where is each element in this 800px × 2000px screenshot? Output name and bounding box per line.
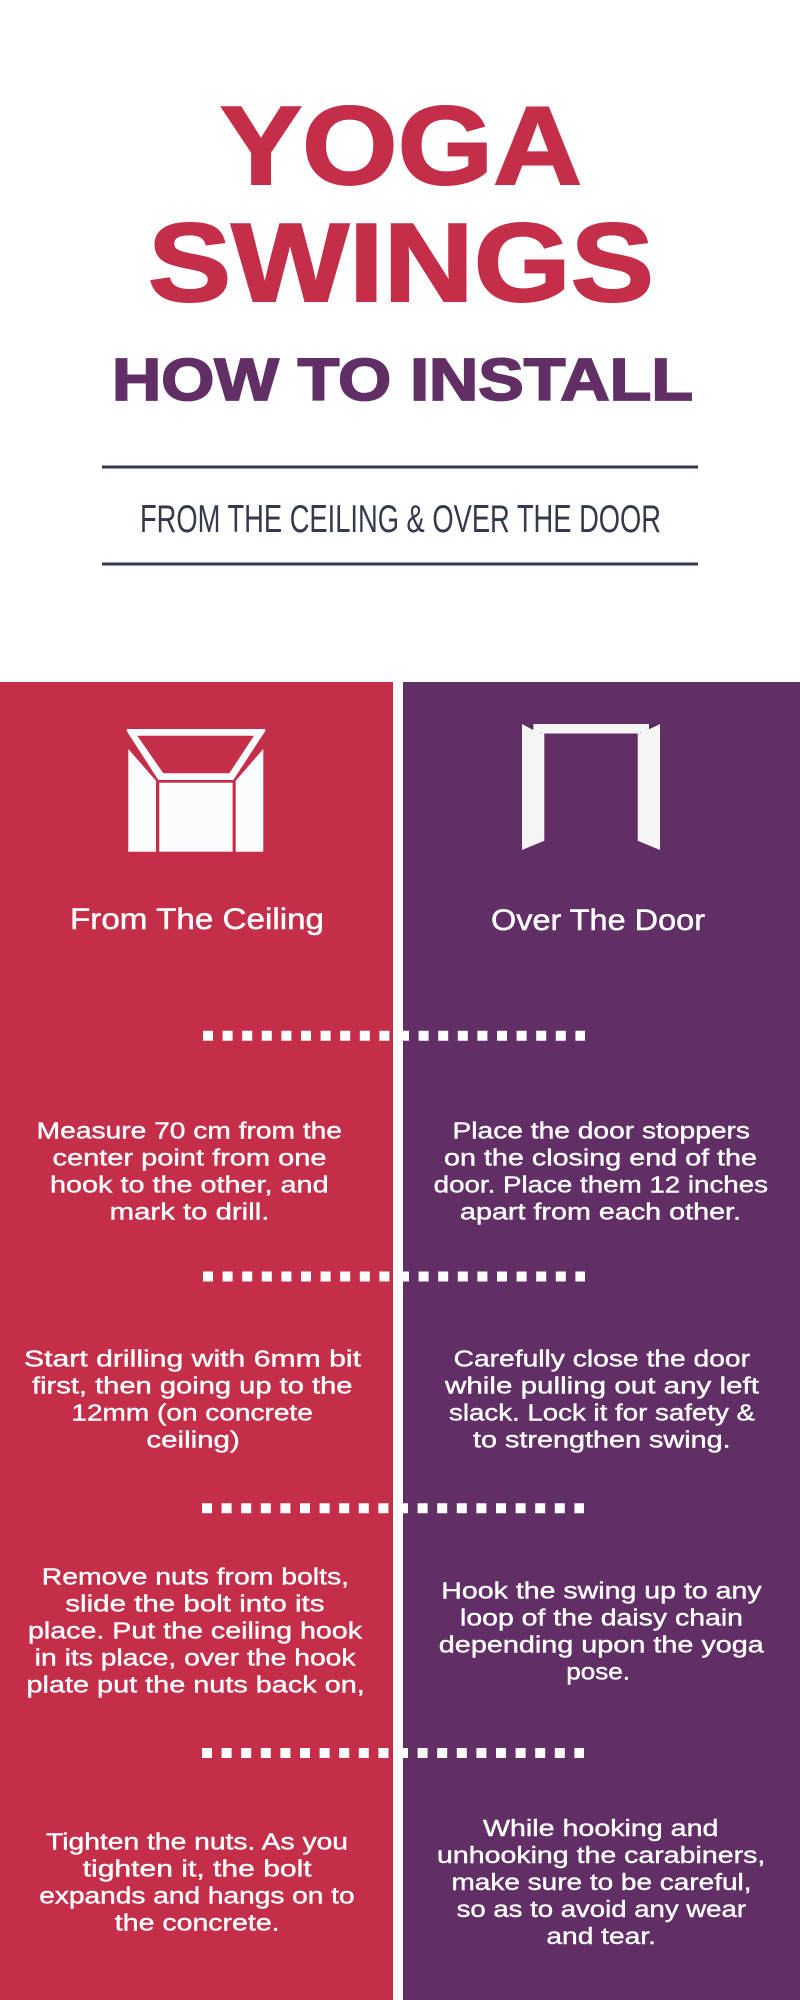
step 3: ceiling: in its place, over the hook — [35, 1644, 356, 1670]
step 1: door: Place the door stoppers — [452, 1118, 750, 1144]
step 2: door — [444, 1346, 760, 1452]
step 3: ceiling — [26, 1563, 365, 1697]
icon: ceiling room — [127, 729, 265, 852]
heading: from the ceiling: From The Ceiling — [70, 903, 324, 936]
icon: door frame — [522, 724, 660, 850]
step 2: door: to strengthen swing. — [473, 1426, 731, 1452]
step 2: ceiling: ceiling) — [146, 1426, 240, 1452]
step 4: ceiling — [39, 1828, 355, 1935]
step 4: door: make sure to be careful, — [452, 1869, 752, 1895]
step 4: door: so as to avoid any wear — [457, 1896, 746, 1922]
step 3: door: pose. — [566, 1659, 630, 1685]
step 1: door: on the closing end of the — [444, 1145, 757, 1171]
step 1: ceiling: center point from one — [52, 1145, 326, 1171]
dotted divider 3 — [202, 1503, 584, 1513]
step 1: door: apart from each other. — [460, 1198, 741, 1224]
step 3: door: Hook the swing up to any — [441, 1578, 762, 1604]
step 3: door: loop of the daisy chain — [460, 1605, 743, 1631]
title: yoga swings: SWINGS — [148, 201, 654, 325]
step 2: door: slack. Lock it for safety & — [449, 1400, 755, 1426]
heading: over the door: Over The Door — [491, 904, 705, 937]
step 1: ceiling: hook to the other, and — [50, 1171, 329, 1197]
step 1: ceiling: mark to drill. — [110, 1198, 269, 1224]
step 4: ceiling: Tighten the nuts. As you — [46, 1828, 348, 1854]
step 4: door: unhooking the carabiners, — [437, 1842, 765, 1868]
title: yoga swings — [148, 84, 654, 325]
step 3: door — [439, 1578, 764, 1685]
step 4: ceiling: the concrete. — [115, 1909, 280, 1935]
step 2: ceiling: first, then going up to the — [32, 1373, 352, 1399]
panel: from the ceiling — [0, 682, 393, 2000]
step 3: ceiling: slide the bolt into its — [65, 1590, 325, 1616]
step 1: ceiling: Measure 70 cm from the — [37, 1118, 342, 1144]
panel: over the door — [403, 682, 800, 2000]
step 4: door: While hooking and — [483, 1815, 718, 1841]
step 2: door: Carefully close the door — [454, 1346, 750, 1372]
step 3: ceiling: place. Put the ceiling hook — [28, 1617, 363, 1643]
step 2: door: while pulling out any left — [444, 1373, 760, 1399]
step 3: ceiling: plate put the nuts back on, — [26, 1671, 365, 1697]
step 1: ceiling — [37, 1118, 342, 1224]
step 2: ceiling — [24, 1346, 362, 1452]
step 2: ceiling: 12mm (on concrete — [71, 1400, 313, 1426]
subtitle: how to install: HOW TO INSTALL — [112, 346, 693, 413]
dotted divider 4 — [202, 1748, 584, 1758]
step 2: ceiling: Start drilling with 6mm bit — [24, 1346, 362, 1372]
step 1: door: door. Place them 12 inches — [434, 1171, 768, 1197]
step 4: door: and tear. — [546, 1923, 656, 1949]
dotted divider 1 — [203, 1031, 585, 1041]
step 3: ceiling: Remove nuts from bolts, — [42, 1563, 349, 1589]
dotted divider 2 — [203, 1272, 585, 1282]
title: yoga swings: YOGA — [220, 84, 582, 208]
step 4: ceiling: tighten it, the bolt — [83, 1855, 312, 1881]
step 1: door — [434, 1118, 768, 1224]
step 4: ceiling: expands and hangs on to — [39, 1882, 355, 1908]
tagline with rules — [102, 466, 698, 566]
step 4: door — [437, 1815, 765, 1949]
step 3: door: depending upon the yoga — [439, 1632, 764, 1658]
